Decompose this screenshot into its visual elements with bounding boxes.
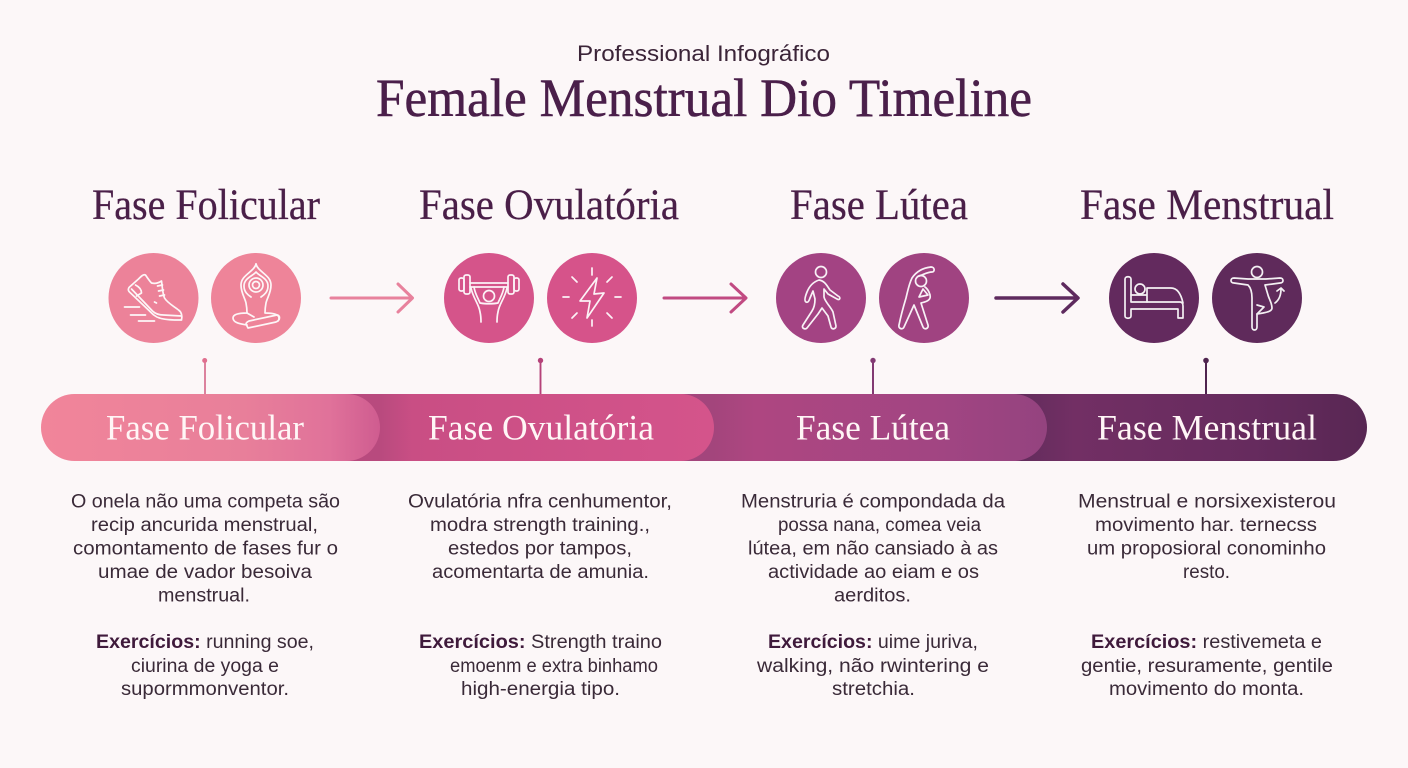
text block: Fase Folicular description [71,492,340,606]
text block: Fase Ovulatória exercises: Exercícios: Strength traino [419,632,662,653]
text block: Fase Lútea exercises: Exercícios: uime juriva, [768,632,978,653]
text block: Fase Menstrual description: movimento har. ternecss [1095,515,1317,536]
heading: Fase Folicular: Fase Folicular [92,182,320,229]
icon: yoga pose [211,253,301,343]
text block: Fase Menstrual description: Menstrual e norsixexisterou [1078,492,1336,512]
text block: Fase Lútea exercises: walking, não rwintering e [756,656,989,677]
icon: running shoe [108,253,198,343]
arrow 1 [331,284,412,312]
bar label: Fase Ovulatória: Fase Ovulatória [428,408,654,448]
bar label: Fase Lútea: Fase Lútea [796,408,950,448]
icon: walking [776,253,866,343]
heading: Fase Ovulatória: Fase Ovulatória [419,182,679,229]
arrow 2 [664,284,746,312]
segment: Fase Lútea [630,394,1047,461]
segment: Fase Folicular [41,394,380,461]
icon: side stretch [879,253,969,343]
text block: Fase Lútea exercises [756,632,989,700]
heading: Fase Menstrual: Fase Menstrual [1080,182,1334,229]
icon: bed rest [1109,253,1199,343]
text block: Fase Lútea description [741,492,1005,606]
pin 2 [538,358,543,394]
text block: Fase Lútea description: possa nana, comea veia [778,515,981,536]
text block: Fase Folicular exercises: ciurina de yoga e [131,656,279,677]
text block: Fase Folicular description: umae de vador besoiva [98,562,312,583]
arrow 3 [996,284,1078,312]
title: Female Menstrual Dio Timeline [376,68,1032,128]
text block: Fase Folicular exercises [96,632,314,700]
text block: Fase Ovulatória description [408,492,672,583]
text block: Fase Ovulatória description: Ovulatória nfra cenhumentor, [408,492,672,512]
text block: Fase Folicular exercises: Exercícios: running soe, [96,632,314,653]
icon: energy bolt [547,253,637,343]
text block: Fase Menstrual exercises: Exercícios: restivemeta e [1091,632,1322,653]
subtitle: Professional Infográfico [577,41,830,66]
text block: Fase Menstrual exercises: gentie, resuramente, gentile [1081,656,1333,677]
pin 4 [1203,358,1209,394]
text block: Fase Folicular description: menstrual. [158,586,250,606]
pin 3 [870,358,876,394]
text block: Fase Ovulatória description: acomentarta de amunia. [432,562,649,583]
text block: Fase Menstrual description [1078,492,1336,583]
text block: Fase Folicular description: O onela não uma competa são [71,492,340,512]
timeline bar [41,394,1367,461]
text block: Fase Menstrual exercises [1081,632,1333,700]
text block: Fase Lútea description: aerditos. [834,586,911,606]
text block: Fase Ovulatória description: modra strength training., [430,515,650,536]
heading: Fase Lútea: Fase Lútea [790,182,968,229]
text block: Fase Lútea description: lútea, em não cansiado à as [748,538,998,560]
text block: Fase Ovulatória exercises [419,632,662,700]
text block: Fase Menstrual description: resto. [1183,562,1230,583]
text block: Fase Lútea description: actividade ao eiam e os [768,562,979,583]
bar label: Fase Folicular: Fase Folicular [106,408,304,448]
pin 1 [202,358,207,394]
icon: weightlifting [444,253,534,343]
text block: Fase Folicular description: recip ancurida menstrual, [91,515,318,536]
icon: balance stretch [1212,253,1302,343]
text block: Fase Folicular exercises: supormmonventor. [121,679,289,700]
segment: Fase Menstrual [960,394,1367,461]
text block: Fase Menstrual exercises: movimento do monta. [1109,679,1304,700]
text block: Fase Ovulatória description: estedos por tampos, [448,538,632,560]
bar label: Fase Menstrual: Fase Menstrual [1097,408,1317,448]
text block: Fase Folicular description: comontamento de fases fur o [73,538,338,560]
text block: Fase Ovulatória exercises: emoenm e extra binhamo [450,656,658,677]
segment: Fase Ovulatória [295,394,714,461]
text block: Fase Lútea description: Menstruria é compondada da [741,492,1005,512]
text block: Fase Ovulatória exercises: high-energia tipo. [461,679,620,700]
text block: Fase Menstrual description: um proposioral conominho [1087,538,1326,560]
text block: Fase Lútea exercises: stretchia. [832,679,915,700]
